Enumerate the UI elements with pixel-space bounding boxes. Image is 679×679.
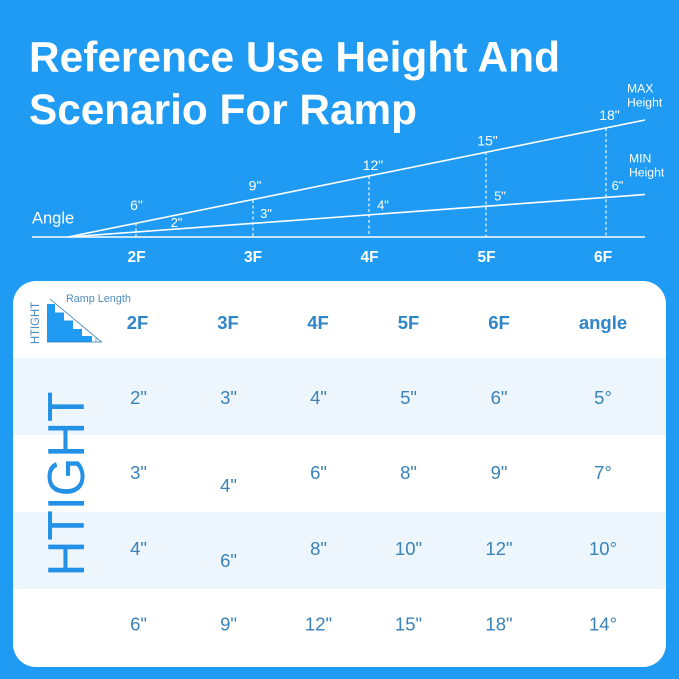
column headers: 5F (398, 312, 419, 333)
row 3 values: 12" (485, 538, 513, 559)
shaded row 3 (13, 512, 666, 589)
max height values: 15" (477, 132, 498, 148)
max height values: 6" (130, 197, 143, 213)
min height label: Height (629, 166, 665, 180)
angle label: Angle (32, 210, 74, 228)
ramp lines (32, 120, 645, 237)
min height label: MIN (629, 152, 651, 166)
shaded row 1 (13, 358, 666, 435)
column headers: 4F (307, 312, 329, 333)
row 3 values (130, 538, 617, 571)
column headers: angle (579, 312, 627, 333)
ramp angle diagram (32, 82, 665, 266)
column headers: 6F (488, 312, 510, 333)
min height values: 2" (171, 215, 183, 230)
row 2 values (130, 462, 612, 496)
max height values: 9" (249, 178, 261, 194)
row 2 values: 6" (310, 462, 327, 483)
row 1 values: 6" (491, 387, 507, 408)
table panel (13, 281, 666, 667)
length axis labels (127, 249, 612, 266)
max height label: MAX (627, 82, 653, 96)
length axis labels: 3F (244, 249, 262, 266)
length axis labels: 2F (127, 249, 146, 266)
row 4 values (130, 614, 617, 634)
title (29, 34, 560, 134)
max height label: Height (627, 96, 663, 110)
row 3 values: 4" (130, 538, 147, 559)
length axis labels: 6F (594, 249, 612, 266)
panel background (13, 281, 666, 667)
row 4 values: 15" (395, 614, 422, 634)
row 1 values: 5" (400, 387, 417, 408)
row 4 values: 6" (130, 614, 147, 634)
min height values: 5" (494, 188, 506, 204)
max height values: 12" (363, 157, 383, 173)
min height values (171, 178, 624, 230)
row 2 values: 9" (491, 462, 507, 483)
row 2 values: 3" (130, 462, 147, 483)
title: Scenario For Ramp (29, 87, 417, 134)
row 1 values: 4" (310, 387, 327, 408)
icon: stairs with ramp (47, 299, 102, 342)
column headers: 2F (127, 312, 148, 333)
large height label: HTIGHT (37, 392, 95, 576)
row 2 values: 7° (594, 462, 612, 483)
row 3 values: 8" (310, 538, 327, 559)
row 2 values: 8" (400, 462, 417, 483)
min height values: 6" (612, 178, 624, 193)
row 1 values: 2" (130, 387, 147, 408)
row 1 values (130, 387, 612, 408)
min height label (629, 152, 665, 180)
row 1 values: 3" (220, 387, 237, 408)
small height label: HTIGHT (28, 301, 42, 344)
min height values: 4" (377, 198, 389, 212)
max height values (130, 107, 620, 213)
max height label (627, 82, 663, 110)
row 4 values: 14° (589, 614, 617, 634)
dashed height markers (136, 128, 606, 237)
max height values: 18" (599, 107, 620, 123)
row 3 values: 10" (395, 538, 422, 559)
column headers: 3F (217, 312, 239, 333)
row 4 values: 9" (220, 614, 237, 634)
row 4 values: 18" (485, 614, 513, 634)
row 1 values: 5° (594, 387, 612, 408)
column headers (127, 312, 627, 333)
row 2 values: 4" (220, 475, 237, 496)
row 3 values: 10° (589, 538, 617, 559)
ramp length label: Ramp Length (66, 293, 131, 305)
row 4 values: 12" (305, 614, 332, 634)
min height values: 3" (260, 206, 272, 221)
length axis labels: 4F (360, 249, 379, 266)
length axis labels: 5F (477, 249, 496, 266)
title: Reference Use Height And (29, 34, 560, 82)
row 3 values: 6" (220, 550, 237, 571)
